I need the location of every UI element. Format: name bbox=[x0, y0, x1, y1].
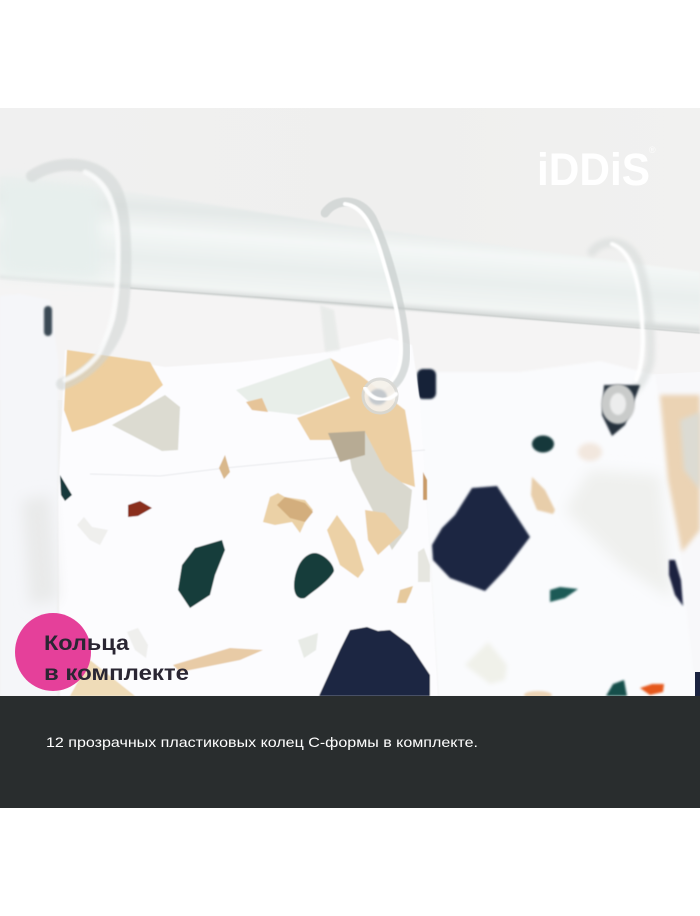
curtain panel: centre bbox=[58, 338, 438, 696]
caption text: 12 прозрачных пластиковых колец С-формы в комплекте. bbox=[46, 734, 478, 750]
logo: IDDIS: iDDiS bbox=[537, 144, 650, 195]
terrazzo: pale right bbox=[418, 548, 430, 582]
terrazzo: dark teal round bbox=[294, 553, 334, 598]
terrazzo: pale green cluster bbox=[236, 358, 352, 415]
terrazzo: navy stone bbox=[319, 627, 430, 696]
curtain rod bbox=[0, 176, 700, 333]
ring 2 bbox=[320, 202, 406, 413]
terrazzo: pale stone bbox=[465, 642, 507, 684]
terrazzo: tan chip bbox=[246, 398, 268, 412]
curtain panel: far right tan pattern bbox=[660, 395, 700, 696]
terrazzo: tan centre bbox=[297, 358, 415, 487]
badge: pink circle bbox=[15, 613, 91, 691]
eyelet 2 bbox=[363, 379, 397, 413]
terrazzo: teal oval bbox=[532, 436, 554, 452]
terrazzo: small tan bottom bbox=[397, 586, 413, 603]
soft fold bbox=[570, 472, 669, 590]
terrazzo: teal chip bbox=[550, 587, 578, 602]
terrazzo: tan large bbox=[64, 350, 163, 432]
terrazzo: navy stone bbox=[432, 486, 530, 591]
terrazzo: small tan bbox=[219, 455, 230, 479]
back curtain panel bbox=[681, 534, 700, 674]
dark caption band bbox=[0, 696, 700, 808]
terrazzo: tan bottom left bbox=[70, 660, 135, 696]
lower wall bbox=[0, 280, 700, 400]
logo: IDDIS: ® bbox=[649, 145, 656, 155]
terrazzo: tan sliver right edge bbox=[423, 472, 427, 500]
terrazzo: tan bottom bbox=[523, 690, 553, 696]
badge text: в комплекте bbox=[44, 662, 189, 685]
terrazzo: teal sliver bbox=[60, 475, 72, 501]
terrazzo: orange chip bbox=[640, 684, 664, 695]
terrazzo: pale chip left bbox=[127, 628, 148, 658]
terrazzo: tan long bbox=[327, 515, 364, 578]
ring 1 bbox=[32, 165, 125, 384]
terrazzo: red chip bbox=[128, 501, 152, 517]
infographic canvas bbox=[0, 108, 700, 808]
ring 3 bbox=[592, 243, 650, 436]
terrazzo: pale marks bbox=[578, 443, 602, 461]
ring 2 clip tail bbox=[320, 305, 340, 352]
terrazzo: tan lower bbox=[365, 510, 402, 555]
curtain panel: blurred foreground left bbox=[0, 294, 58, 696]
photo: shower curtain on rod bbox=[0, 108, 700, 699]
seam bbox=[90, 450, 425, 476]
terrazzo: pale chips bbox=[77, 517, 108, 545]
terrazzo: grey-beige bbox=[112, 395, 180, 451]
terrazzo: tan pair bbox=[263, 493, 313, 533]
curtain panel: right bbox=[416, 361, 696, 699]
terrazzo: tan stone bbox=[531, 477, 555, 514]
terrazzo: darker tan bbox=[277, 497, 313, 522]
terrazzo: grey overlay bbox=[345, 432, 412, 550]
eyelet 3 bbox=[602, 385, 640, 436]
badge text: Кольца bbox=[44, 632, 129, 655]
terrazzo: teal bottom bbox=[606, 680, 627, 696]
navy chip behind ring bbox=[417, 369, 436, 399]
terrazzo: dark grey square bbox=[328, 431, 365, 462]
terrazzo: navy sliver bbox=[669, 560, 683, 606]
terrazzo: dark teal large bbox=[178, 540, 225, 608]
wall bbox=[0, 108, 700, 696]
terrazzo: tan streak bbox=[173, 648, 263, 672]
terrazzo: pale chip lower bbox=[298, 633, 318, 658]
badge text bbox=[44, 632, 189, 685]
